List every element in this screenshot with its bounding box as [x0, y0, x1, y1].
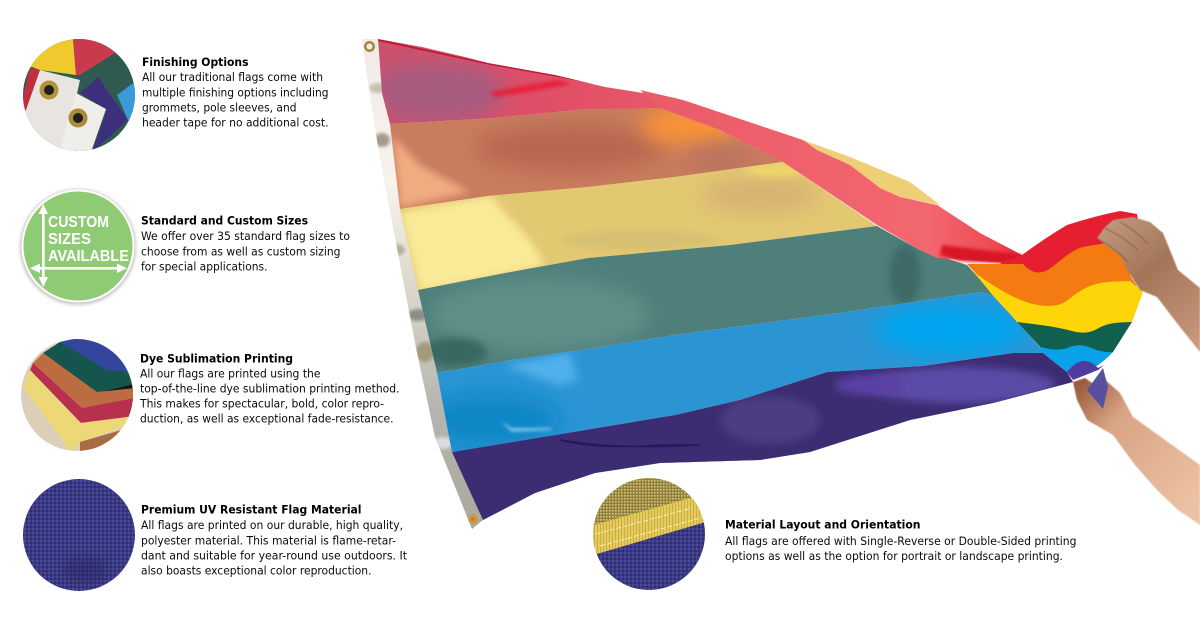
heading: dye sublimation printing: Dye Sublimation Printing: [140, 352, 293, 366]
front orange: [967, 242, 1140, 330]
red fold: [640, 90, 1023, 264]
front blue: [1040, 345, 1113, 378]
purple stripe: [445, 345, 1085, 525]
text: premium material: dant and suitable for year-round use outdoors. It: [141, 548, 407, 562]
icon: custom sizes badge: [20, 189, 136, 305]
text: material layout: All flags are offered with Single-Reverse or Double-Sided printing: [725, 534, 1076, 548]
text: standard and custom sizes: for special applications.: [141, 260, 268, 274]
text: finishing options: [142, 70, 328, 130]
heading: standard and custom sizes: Standard and Custom Sizes: [141, 214, 308, 228]
red stripe: [378, 39, 678, 124]
yellow edge above fold: [803, 140, 940, 205]
text: dye sublimation printing: [139, 366, 400, 426]
text: premium material: polyester material. This material is flame-retar-: [141, 534, 396, 548]
text: material layout: [725, 534, 1076, 563]
green stripe: [418, 226, 993, 373]
text: premium material: also boasts exceptional color reproduction.: [141, 564, 372, 578]
heading: finishing options: Finishing Options: [142, 55, 249, 69]
red fold shadow: [940, 245, 1023, 264]
front purple: [1067, 361, 1104, 380]
text: finishing options: multiple finishing options including: [142, 86, 328, 100]
icon: custom sizes badge: CUSTOM: [48, 214, 109, 231]
blue stripe: [437, 292, 1043, 452]
illustration: rainbow flag: [355, 30, 1145, 535]
icon: material layout swatch: [593, 478, 705, 590]
text: premium material: [141, 518, 407, 578]
heading: material layout and orientation: Material Layout and Orientation: [725, 518, 920, 532]
front yellow: [972, 270, 1143, 345]
text: standard and custom sizes: choose from as well as custom sizing: [141, 244, 340, 258]
icon: dye sublimation photo: [20, 333, 135, 453]
text: standard and custom sizes: [141, 229, 350, 274]
heading: premium uv resistant flag material: Premium UV Resistant Flag Material: [141, 502, 362, 516]
front red: [1000, 211, 1145, 290]
illustration: upper hand and arm: [1097, 217, 1200, 352]
text: finishing options: All our traditional flags come with: [142, 70, 323, 84]
hoist strip: [362, 39, 483, 529]
front green: [1017, 322, 1132, 365]
icon: custom sizes badge: SIZES: [48, 231, 91, 248]
illustration: held flag corner: [1087, 368, 1108, 409]
illustration: lower hand and arm: [1073, 378, 1200, 525]
icon: custom sizes badge: AVAILABLE: [48, 248, 129, 265]
yellow stripe: [400, 162, 877, 290]
text: standard and custom sizes: We offer over 35 standard flag sizes to: [141, 229, 350, 243]
icon: premium material swatch: [23, 479, 135, 591]
text: premium material: All flags are printed on our durable, high quality,: [141, 518, 403, 532]
text: dye sublimation printing: top-of-the-line dye sublimation printing method.: [140, 382, 400, 396]
text: finishing options: header tape for no additional cost.: [142, 116, 328, 130]
text: material layout: options as well as the option for portrait or landscape printing.: [725, 549, 1063, 563]
text: dye sublimation printing: duction, as well as exceptional fade-resistance.: [140, 412, 394, 426]
text: finishing options: grommets, pole sleeves, and: [142, 100, 296, 114]
text: dye sublimation printing: This makes for spectacular, bold, color repro-: [139, 396, 384, 410]
orange stripe: [390, 108, 783, 209]
text: dye sublimation printing: All our flags are printed using the: [140, 366, 320, 380]
icon: finishing options photo: [23, 39, 135, 151]
grommets: [364, 41, 478, 524]
